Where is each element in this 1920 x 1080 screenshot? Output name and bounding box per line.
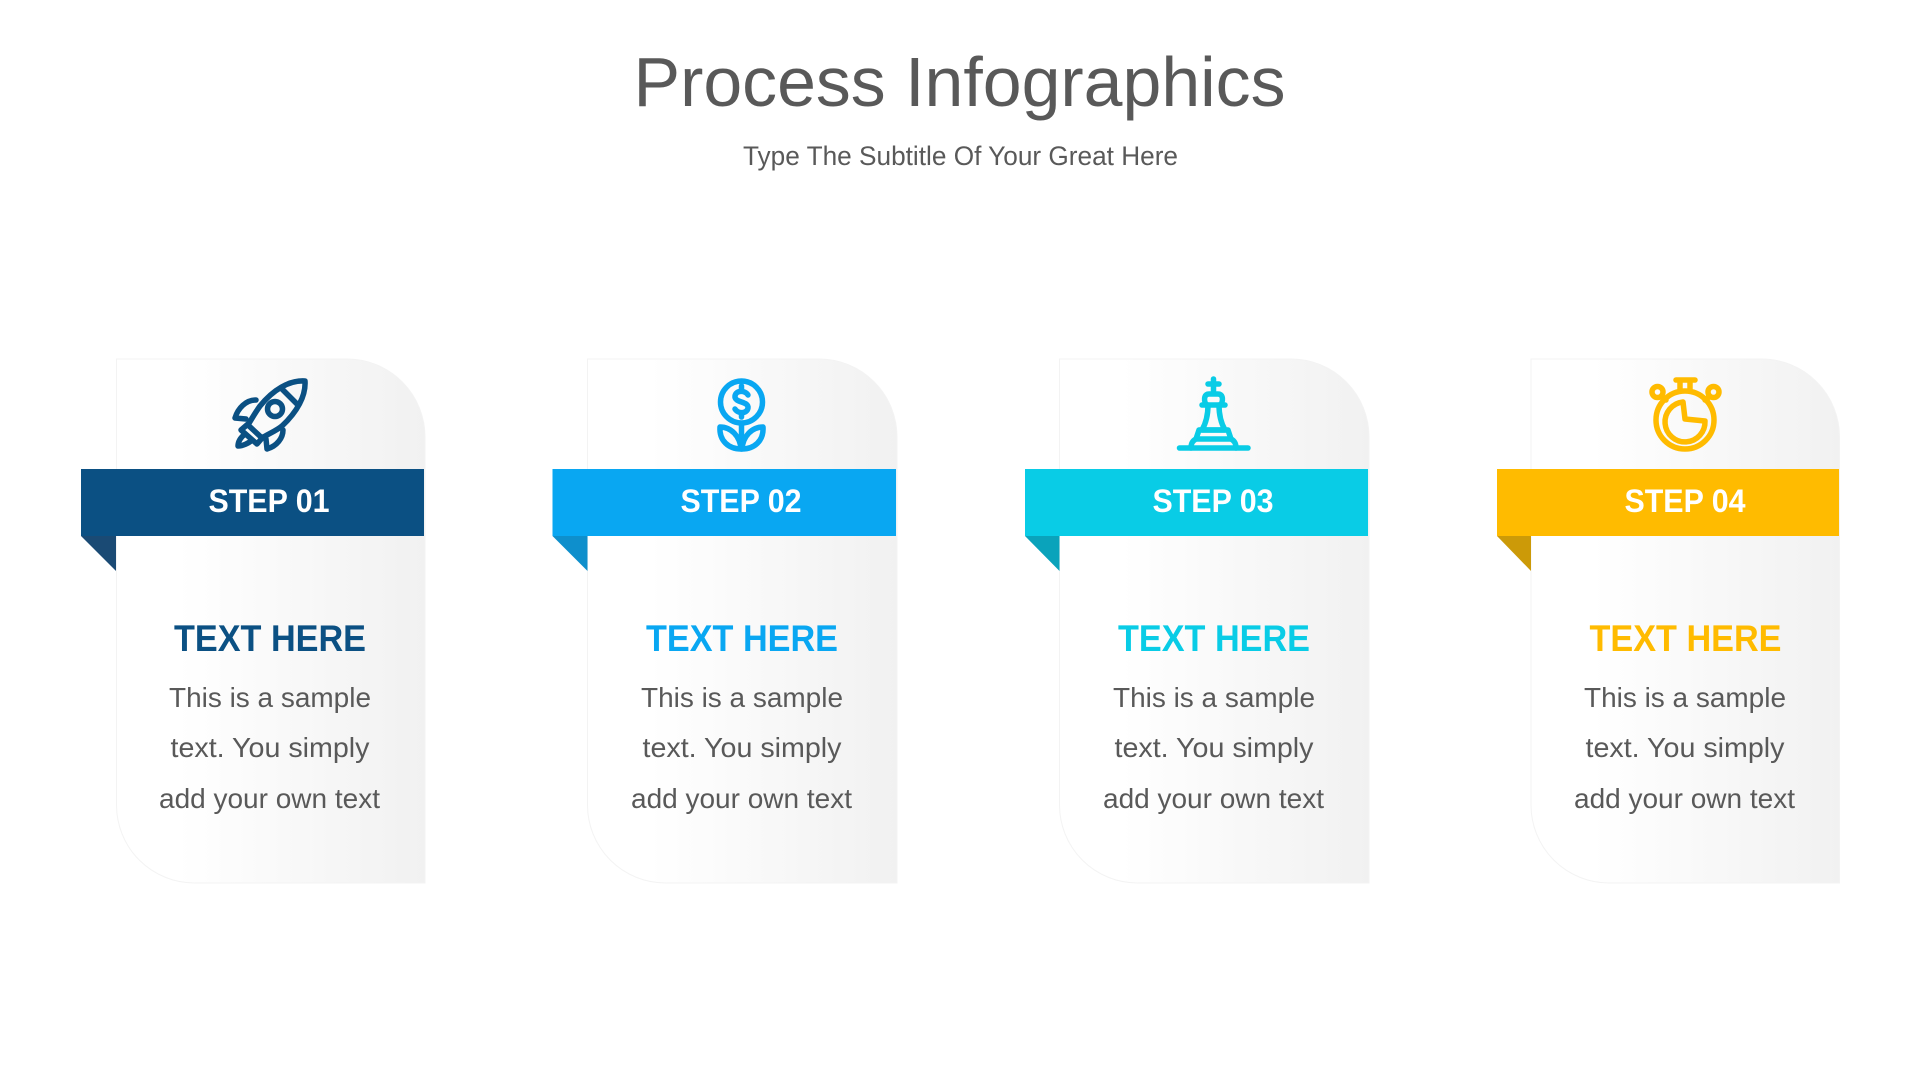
- body text: [159, 682, 380, 814]
- ribbon fold: [552, 536, 588, 571]
- icon: money flower: [720, 381, 763, 449]
- body text: [631, 682, 852, 814]
- panel: step 01: [81, 359, 425, 883]
- heading: TEXT HERE: [1590, 618, 1782, 659]
- ribbon: [1025, 469, 1368, 536]
- body text: This is a sample: [1113, 682, 1315, 713]
- step label: STEP 04: [1624, 483, 1746, 519]
- icon: rocket: [235, 381, 305, 449]
- step label: STEP 01: [208, 483, 330, 519]
- ribbon: [552, 469, 896, 536]
- step label: STEP 02: [680, 483, 802, 519]
- panel: step 04: [1497, 359, 1840, 883]
- body text: text. You simply: [642, 732, 842, 763]
- body text: [1574, 682, 1795, 814]
- body text: add your own text: [1574, 783, 1795, 814]
- card background: [588, 359, 897, 883]
- heading: TEXT HERE: [646, 618, 838, 659]
- body text: text. You simply: [170, 732, 370, 763]
- card background: [116, 359, 425, 883]
- body text: This is a sample: [1584, 682, 1786, 713]
- ribbon: [1497, 469, 1839, 536]
- step label: STEP 03: [1152, 483, 1274, 519]
- heading: TEXT HERE: [174, 618, 366, 659]
- panel: step 02: [552, 359, 897, 883]
- card background: [1531, 359, 1840, 883]
- panel: step 03: [1025, 359, 1369, 883]
- body text: add your own text: [1103, 783, 1324, 814]
- icon: stopwatch: [1652, 380, 1719, 449]
- body text: text. You simply: [1114, 732, 1314, 763]
- ribbon fold: [81, 536, 116, 571]
- card background: [1060, 359, 1369, 883]
- subtitle: Type The Subtitle Of Your Great Here: [743, 141, 1178, 171]
- title: Process Infographics: [634, 43, 1286, 121]
- ribbon fold: [1025, 536, 1060, 571]
- ribbon: [81, 469, 424, 536]
- body text: add your own text: [159, 783, 380, 814]
- ribbon fold: [1497, 536, 1531, 571]
- icon: chess king: [1180, 379, 1248, 448]
- body text: This is a sample: [169, 682, 371, 713]
- body text: This is a sample: [641, 682, 843, 713]
- heading: TEXT HERE: [1118, 618, 1310, 659]
- body text: text. You simply: [1586, 732, 1784, 763]
- body text: add your own text: [631, 783, 852, 814]
- body text: [1103, 682, 1324, 814]
